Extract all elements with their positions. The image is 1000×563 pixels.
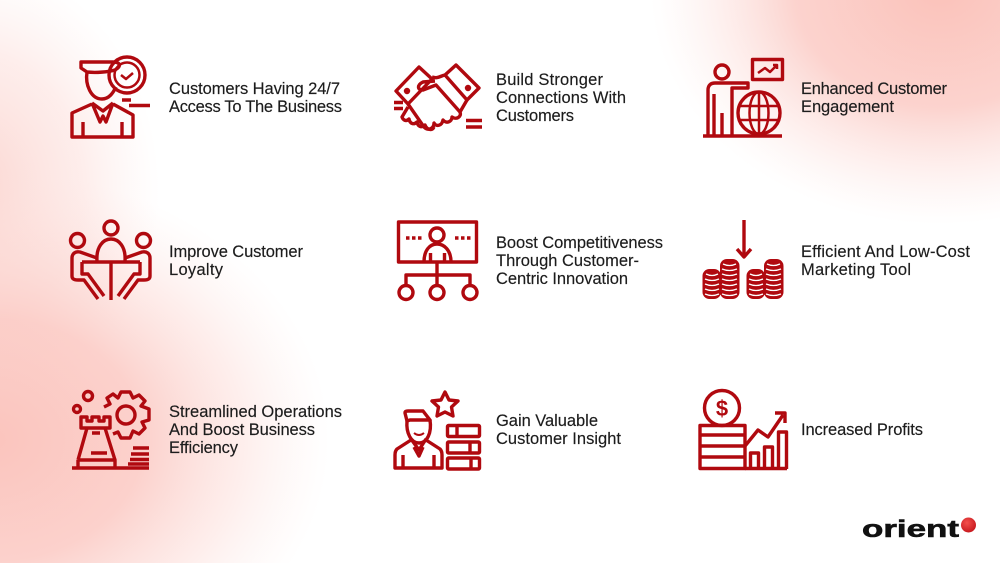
icon: handshake: [394, 65, 482, 129]
marketing label: Marketing Tool: [801, 261, 911, 279]
competitiveness label: Boost Competitiveness: [496, 234, 663, 252]
profits label: Increased Profits: [801, 421, 923, 439]
competitiveness label: Through Customer-: [496, 252, 639, 270]
engagement label: Engagement: [801, 98, 894, 116]
connections label: Customers: [496, 107, 574, 125]
logo: orient: orient: [862, 516, 959, 543]
operations label: [169, 403, 342, 457]
competitiveness label: [496, 234, 663, 288]
icon: coin stack with growth chart: [700, 390, 787, 469]
icon: man with star and bars: [395, 392, 480, 469]
background: top right pink glow: [640, 0, 1000, 240]
operations label: Streamlined Operations: [169, 403, 342, 421]
icon: rook and gear: [72, 392, 149, 468]
icon: customer with clock: [72, 57, 150, 137]
operations label: Efficiency: [169, 439, 239, 457]
insight label: [496, 412, 621, 448]
icon: down arrow and coin stacks: [702, 220, 784, 299]
marketing label: [801, 243, 970, 279]
icon: coin stack with growth chart: $: [716, 396, 728, 421]
connections label: Build Stronger: [496, 71, 604, 89]
operations label: And Boost Business: [169, 421, 315, 439]
icon: presenter with globe: [703, 60, 782, 136]
icon: meeting table: [70, 221, 150, 300]
engagement label: Enhanced Customer: [801, 80, 948, 98]
background: left pink glow: [0, 0, 400, 563]
customers 24/7 label: Access To The Business: [169, 98, 342, 116]
customers 24/7 label: Customers Having 24/7: [169, 80, 340, 98]
customers 24/7 label: [169, 80, 342, 116]
insight label: Gain Valuable: [496, 412, 598, 430]
loyalty label: Loyalty: [169, 261, 224, 279]
logo: orient: [862, 516, 976, 543]
connections label: Connections With: [496, 89, 626, 107]
connections label: [496, 71, 626, 125]
marketing label: Efficient And Low-Cost: [801, 243, 970, 261]
engagement label: [801, 80, 948, 116]
competitiveness label: Centric Innovation: [496, 270, 628, 288]
loyalty label: [169, 243, 304, 279]
loyalty label: Improve Customer: [169, 243, 304, 261]
insight label: Customer Insight: [496, 430, 621, 448]
icon: screen with network: [398, 222, 477, 300]
